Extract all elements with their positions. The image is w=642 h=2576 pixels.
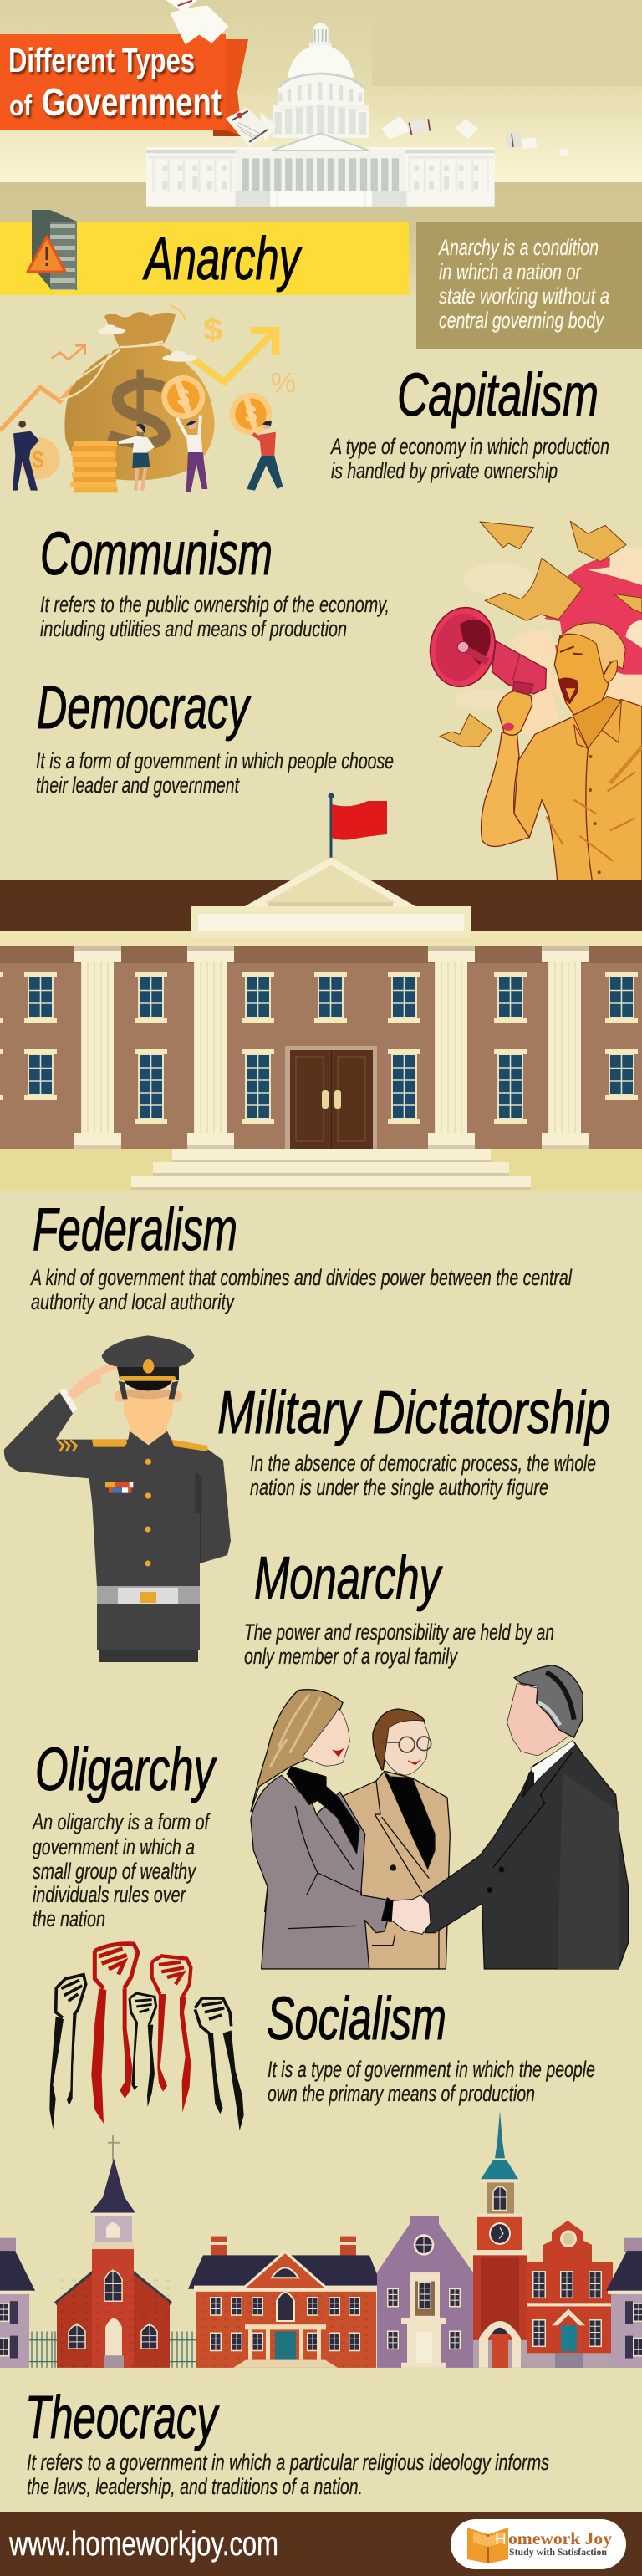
icon: small flying papers (506, 131, 569, 157)
flying papers near ribbon (166, 0, 478, 147)
text: federalism definition (30, 1265, 573, 1314)
manor house (188, 2237, 383, 2368)
illustration: government building (0, 861, 642, 1191)
heading: anarchy: Anarchy (142, 226, 303, 293)
footer url: www.homeworkjoy.com (8, 2524, 278, 2563)
text: federalism definition: authority and local authority (31, 1289, 235, 1314)
illustration: capitalism money bag and people (0, 305, 296, 492)
text: oligarchy definition: the nation (33, 1906, 105, 1931)
heading: theocracy: Theocracy (25, 2385, 220, 2451)
text: capitalism definition: is handled by private ownership (331, 458, 558, 483)
head (554, 633, 613, 715)
text: socialism definition (268, 2057, 595, 2106)
text: socialism definition: own the primary means of production (268, 2081, 535, 2106)
heading: socialism: Socialism (267, 1986, 446, 2053)
text: theocracy definition: the laws, leadership, and traditions of a nation. (27, 2474, 363, 2499)
footer bar (0, 2512, 642, 2576)
heading: oligarchy: Oligarchy (35, 1737, 217, 1803)
head, cap and saluting arm (4, 1335, 228, 1513)
text: monarchy definition: only member of a royal family (244, 1644, 458, 1669)
church (54, 2135, 172, 2368)
black fist (195, 1998, 244, 2130)
text: communism definition: It refers to the public ownership of the economy, (40, 592, 390, 617)
text: democracy definition: their leader and government (36, 773, 240, 798)
heading: communism: Communism (40, 521, 273, 588)
text: oligarchy definition: small group of wealthy (33, 1859, 196, 1884)
icon: server tower with warning sign (28, 210, 77, 290)
text: capitalism definition (330, 434, 609, 483)
logo badge (451, 2519, 626, 2569)
neck and collar (573, 696, 621, 748)
heading: democracy: Democracy (37, 675, 252, 742)
purple gabled house (377, 2216, 476, 2368)
title: different types: Different Types (8, 41, 195, 79)
text: democracy definition: It is a form of government in which people choose (36, 748, 394, 773)
megaphone (423, 601, 546, 696)
hand (497, 691, 532, 735)
woman in beige coat (343, 1709, 450, 1969)
text: theocracy definition (27, 2450, 549, 2499)
icon: flag on pole (328, 793, 387, 860)
coins: $ (177, 385, 190, 412)
title: of government: of (9, 90, 33, 122)
steps (131, 1149, 531, 1190)
handshake (391, 1895, 431, 1934)
illustration: raised fists (49, 1944, 244, 2130)
title ribbon (0, 34, 248, 136)
logo badge: Study with Satisfaction (509, 2548, 608, 2558)
man in dark suit (424, 1665, 629, 1969)
red fist (91, 1944, 138, 2124)
illustration: shouting man with megaphone (423, 521, 642, 882)
black fist (130, 1993, 156, 2107)
black fist (49, 1975, 86, 2130)
logo badge: H (495, 2531, 507, 2548)
coins (18, 375, 272, 479)
heading: monarchy: Monarchy (254, 1545, 443, 1612)
text: oligarchy definition (32, 1809, 211, 1931)
arm (482, 732, 529, 846)
panel: anarchy definition (416, 222, 642, 349)
text: communism definition: including utilities and means of production (40, 616, 347, 641)
heading: federalism: Federalism (33, 1196, 237, 1263)
text: military dictatorship definition (250, 1451, 596, 1500)
logo badge: omework Joy (508, 2528, 613, 2548)
title: of government: Government (42, 80, 222, 124)
text: oligarchy definition: government in which a (33, 1834, 195, 1859)
red fist (152, 1956, 191, 2113)
clouds and red burst (454, 549, 642, 736)
illustration: capitalism money bag and people: % (271, 368, 296, 399)
fences (29, 2331, 196, 2368)
icon: papers over ribbon (170, 6, 277, 147)
columns (74, 946, 588, 1149)
text: oligarchy definition: individuals rules over (33, 1882, 186, 1907)
text: democracy definition (36, 748, 394, 798)
illustration: saluting soldier (4, 1335, 231, 1662)
people (13, 416, 283, 492)
clock tower (471, 2110, 529, 2368)
paper plane and papers (440, 521, 642, 747)
panel: anarchy heading band (0, 210, 409, 295)
windows (0, 972, 638, 1124)
torso (514, 700, 642, 882)
coins: $ (32, 446, 44, 474)
trousers and lower jacket (90, 1446, 231, 1662)
door (285, 1046, 377, 1149)
illustration: capitalism money bag and people: $ (203, 312, 223, 347)
coins: $ (245, 401, 257, 427)
illustration: three people shaking hands (251, 1665, 629, 1969)
icon: capitol building (146, 0, 495, 207)
red gabled house (527, 2221, 613, 2368)
right house (606, 2238, 642, 2368)
text: communism definition (40, 592, 390, 641)
panel: anarchy definition: in which a nation or (439, 259, 582, 284)
illustration: town skyline (0, 2110, 642, 2368)
text: oligarchy definition: An oligarchy is a form of (32, 1809, 211, 1834)
title: of government (9, 80, 222, 124)
woman in grey coat (251, 1690, 394, 1969)
coin stack (70, 441, 118, 492)
text: monarchy definition (244, 1620, 554, 1669)
left house (0, 2238, 35, 2368)
